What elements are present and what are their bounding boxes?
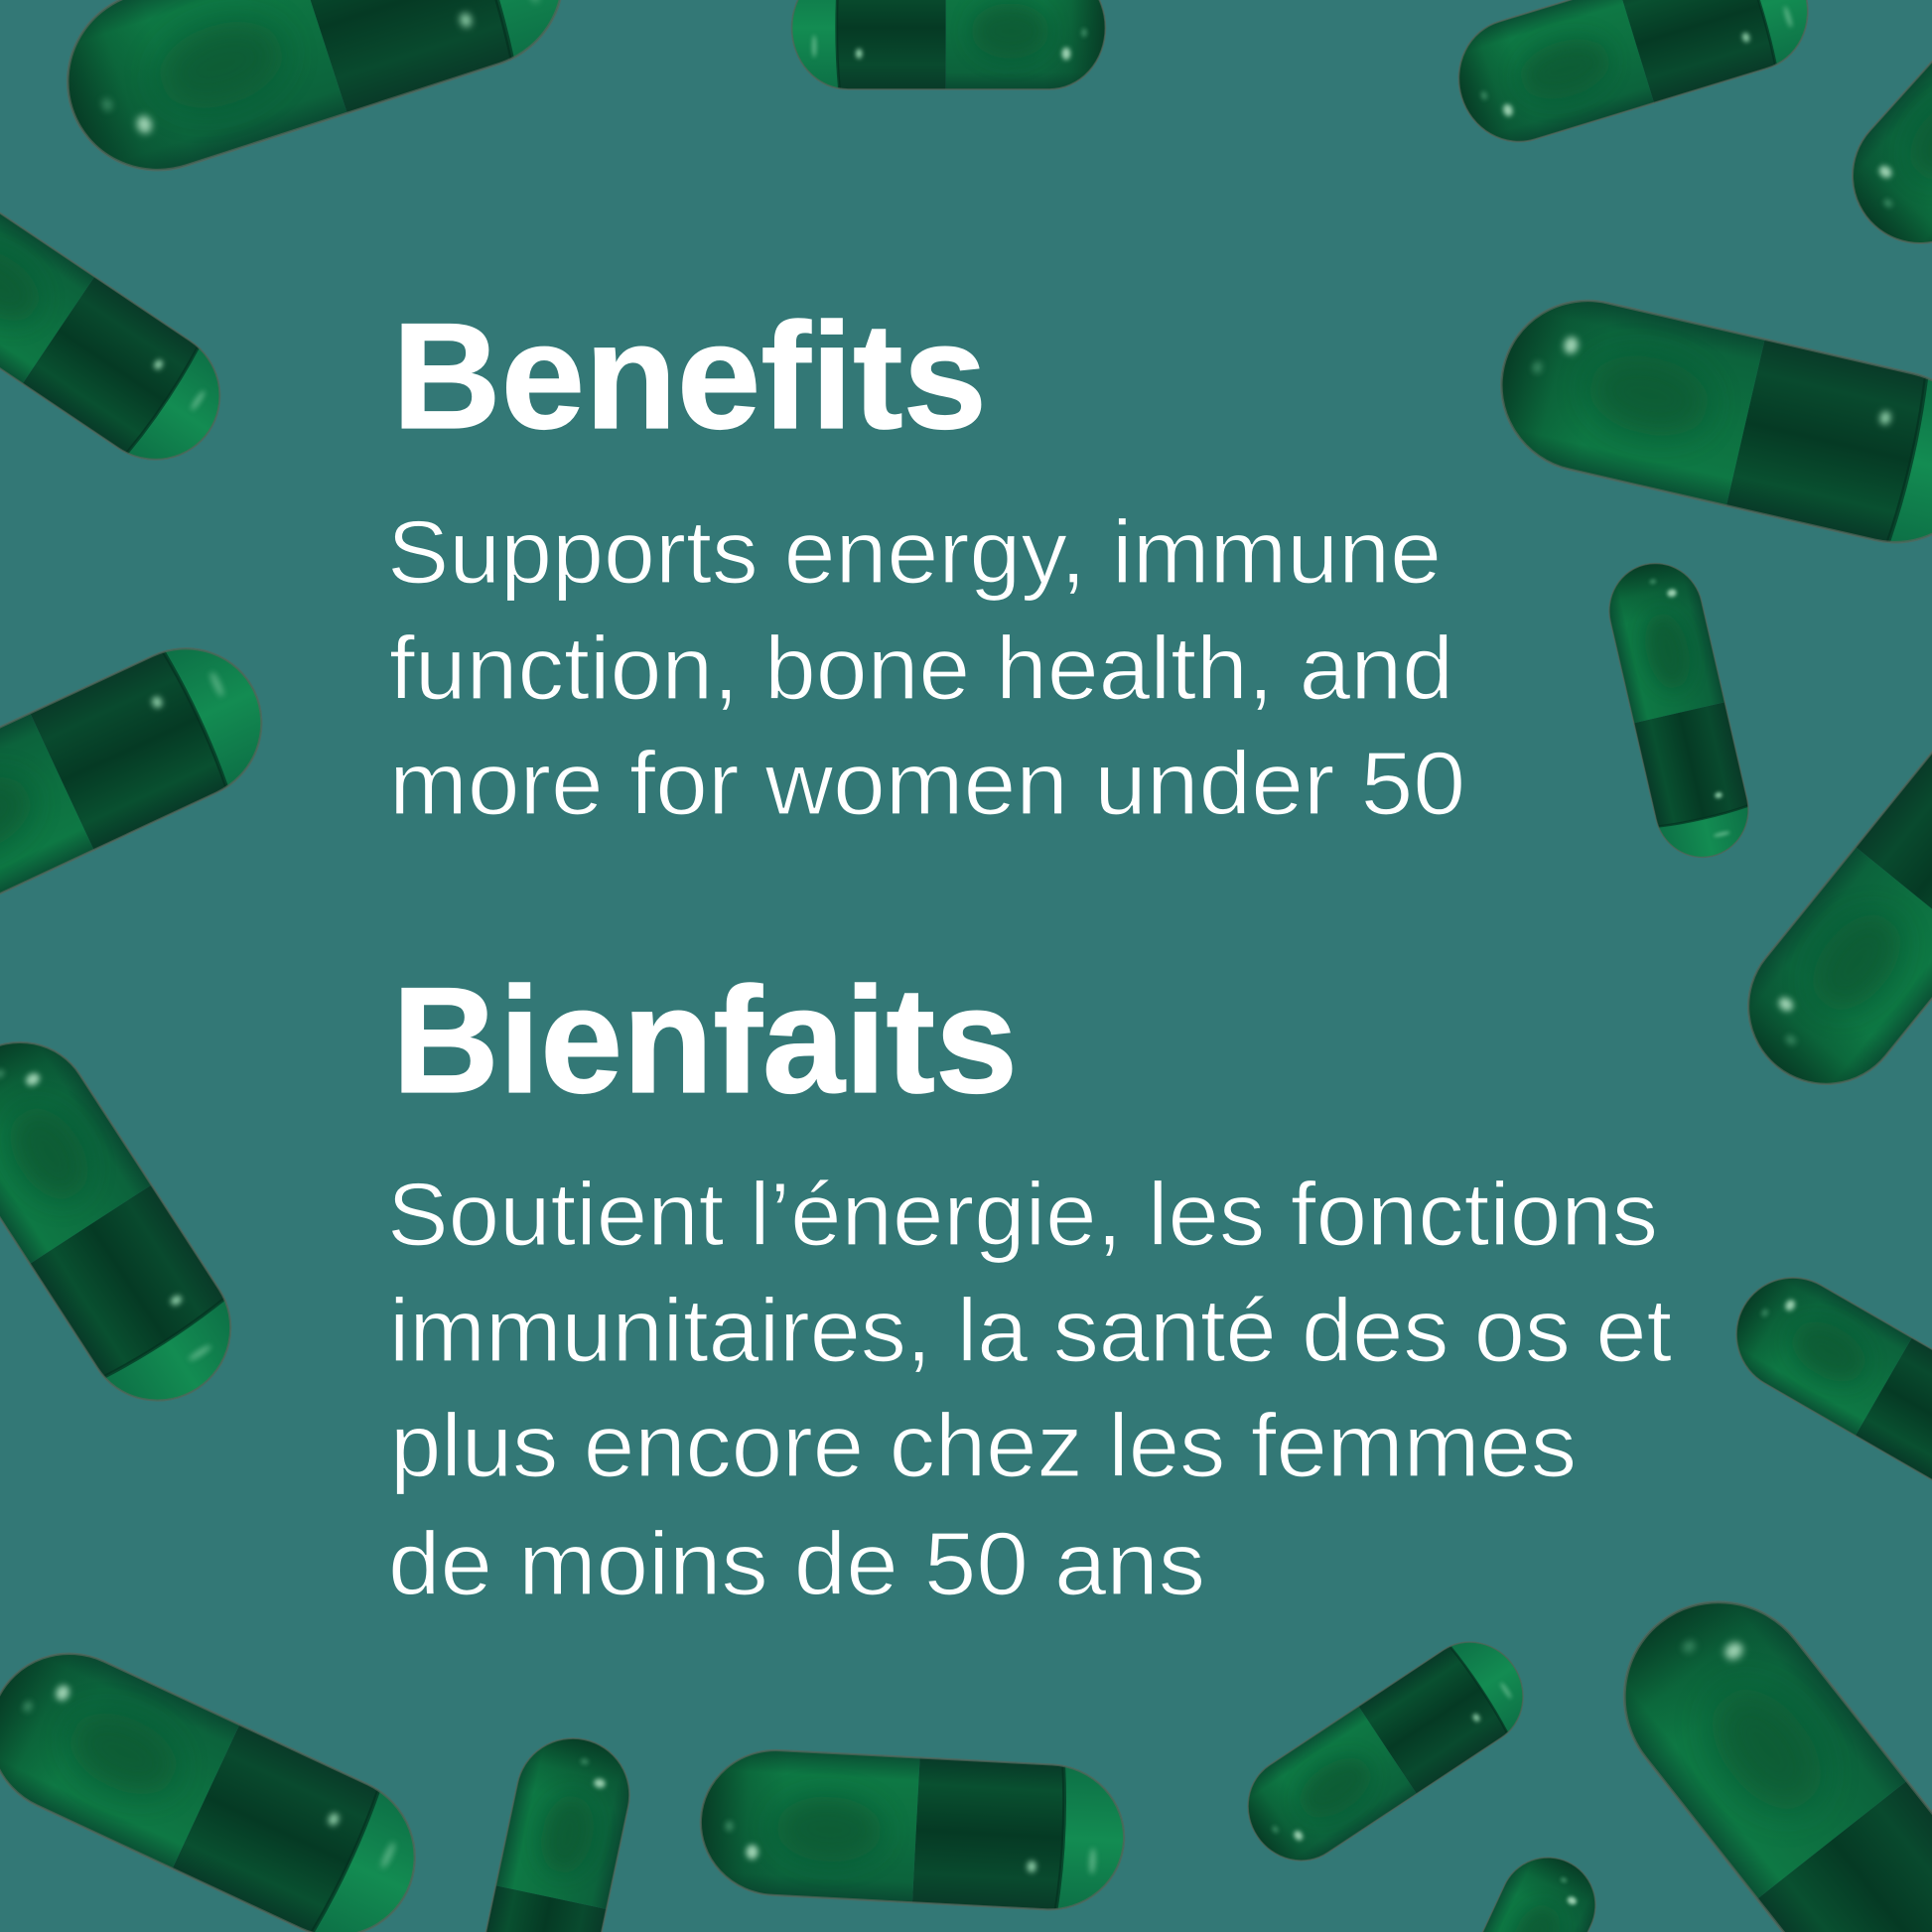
capsule: left middle (0, 619, 297, 943)
capsule: right middle (1717, 673, 1932, 1116)
heading: Bienfaits: Bienfaits (392, 956, 1018, 1125)
capsule: top centre (783, 0, 1105, 89)
capsule: bottom right large (1586, 1564, 1932, 1932)
text block: English benefits (387, 503, 1465, 834)
capsule: right small vertical (1599, 554, 1759, 874)
capsule: left lower (0, 1015, 264, 1437)
heading: Benefits: Benefits (392, 292, 987, 461)
text block: French benefits: plus encore chez les femmes (390, 1397, 1577, 1496)
capsule: left upper (0, 172, 253, 490)
text block: French benefits: immunitaires, la santé des os et (389, 1282, 1672, 1381)
capsule: bottom centre (697, 1746, 1139, 1914)
capsule: right large (1484, 283, 1932, 563)
capsule: right lower (1716, 1257, 1932, 1518)
text block: French benefits: de moins de 50 ans (388, 1515, 1205, 1614)
capsule: top right corner (1825, 0, 1932, 271)
capsule: bottom small partial (1409, 1842, 1611, 1932)
capsule: top right (1444, 0, 1831, 156)
capsule: top left large (45, 0, 599, 194)
text block: English benefits: Supports energy, immune (387, 503, 1442, 603)
capsule: bottom left large (0, 1627, 452, 1932)
text block: English benefits: function, bone health, and (389, 620, 1453, 719)
capsule: bottom centre right (1228, 1618, 1549, 1880)
text block: French benefits: Soutient l’énergie, les fonctions (387, 1166, 1658, 1265)
text block: English benefits: more for women under 50 (389, 735, 1465, 834)
capsule: bottom left small (462, 1727, 640, 1932)
text block: French benefits (387, 1166, 1672, 1614)
